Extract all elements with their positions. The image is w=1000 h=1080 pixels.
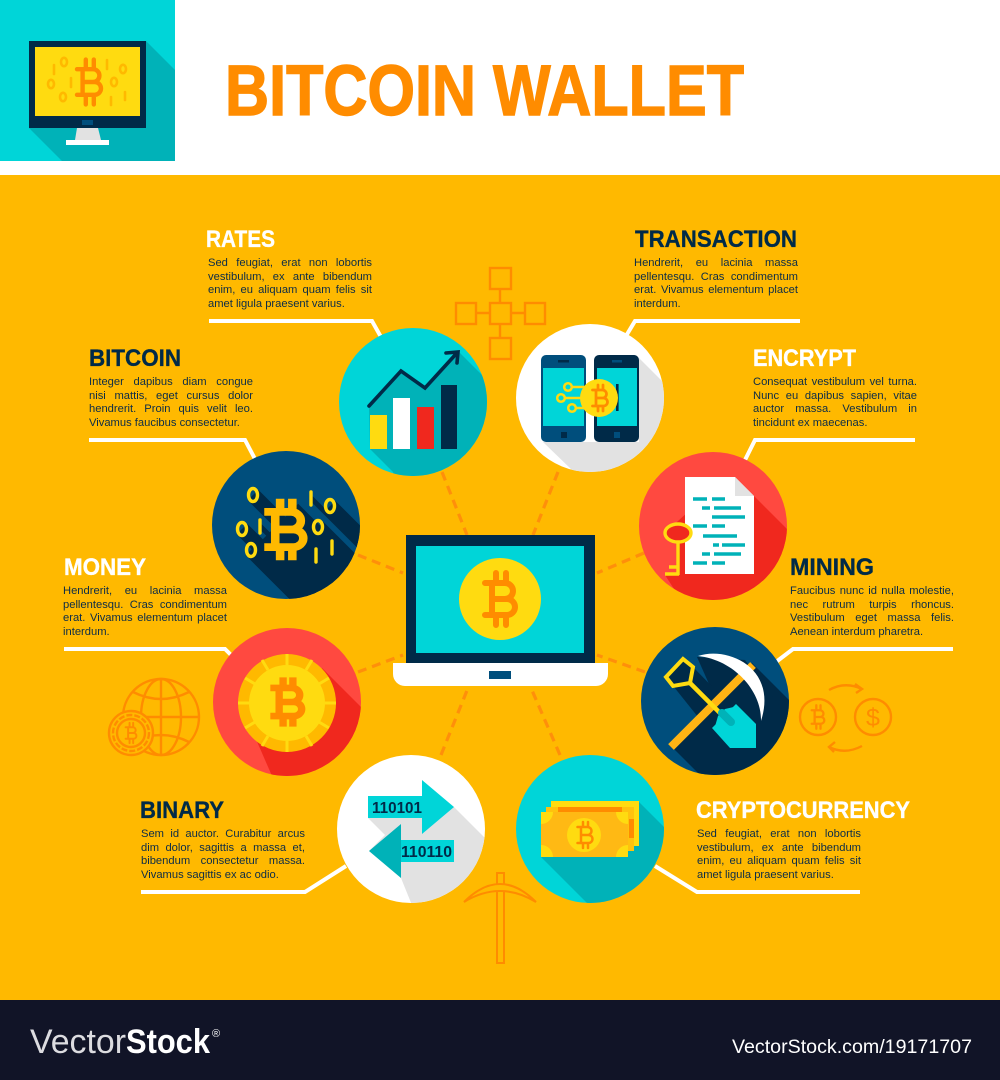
decorative icon: pickaxe <box>464 873 536 963</box>
icon: binary arrows: 110101 <box>372 800 422 817</box>
text: encrypt: Nunc eu dapibus sapien, vitae <box>753 390 917 402</box>
background panel <box>0 175 1000 1000</box>
text: mining: Vestibulum eget massa felis. <box>790 612 954 624</box>
text: bitcoin: hendrerit. Proin quis velit leo. <box>89 403 253 415</box>
dashed connectors to laptop <box>358 472 645 755</box>
text: mining: Aenean interdum pharetra. <box>790 626 923 638</box>
header icon: monitor with bitcoin <box>0 0 175 161</box>
panel: money <box>64 558 361 776</box>
footer logo: Vector <box>30 1023 126 1061</box>
panel: rates <box>207 230 487 476</box>
heading: money: MONEY <box>64 554 146 581</box>
heading: encrypt: ENCRYPT <box>753 345 856 372</box>
text: transaction: erat. Vivamus elementum placet <box>634 284 798 296</box>
footer logo: ® <box>212 1028 220 1040</box>
icon: bitcoin with bits <box>212 451 360 599</box>
footer bar <box>0 1000 1000 1080</box>
panel: encrypt <box>639 349 916 600</box>
text: transaction: pellentesqu. Cras condimentum <box>634 271 798 283</box>
text: mining: nec rutrum turpis rhoncus. <box>790 599 954 611</box>
heading: rates: RATES <box>206 226 275 253</box>
text: cryptocurrency <box>697 828 861 884</box>
text: bitcoin: Vivamus faucibus consectetur. <box>89 417 240 429</box>
heading: mining: MINING <box>790 554 874 581</box>
footer logo <box>30 1023 220 1061</box>
title: BITCOIN WALLET <box>225 52 744 131</box>
panel: mining <box>641 558 953 775</box>
text: binary <box>141 828 305 884</box>
text: binary: bibendum consectetur massa. <box>141 855 305 867</box>
text: rates: amet ligula praesent varius. <box>208 298 345 310</box>
heading: transaction: TRANSACTION <box>635 226 797 253</box>
text: encrypt <box>753 376 917 432</box>
text: binary: dim dolor, sagittis a massa et, <box>141 842 305 854</box>
panel: binary <box>141 755 485 903</box>
text: rates <box>208 257 372 313</box>
text: money: pellentesqu. Cras condimentum <box>63 599 227 611</box>
text: money: erat. Vivamus elementum placet <box>63 612 227 624</box>
text: money: Hendrerit, eu lacinia massa <box>63 585 227 597</box>
decorative icon: currency exchange: $ <box>866 704 880 732</box>
panel: cryptocurrency <box>516 755 910 903</box>
text: rates: vestibulum, ex ante bibendum <box>208 271 372 283</box>
heading: bitcoin: BITCOIN <box>89 345 181 372</box>
text: rates: enim, eu aliquam quam felis sit <box>208 284 372 296</box>
icon: binary arrows <box>337 755 485 903</box>
text: mining <box>790 585 954 641</box>
text: rates: Sed feugiat, erat non lobortis <box>208 257 372 269</box>
text: encrypt: Consequat vestibulum vel turna. <box>753 376 917 388</box>
icon: phones with coin <box>516 324 664 472</box>
icon: pickaxe and shovel <box>641 627 789 775</box>
decorative icon: currency exchange <box>800 684 891 752</box>
text: mining: Faucibus nunc id nulla molestie, <box>790 585 954 597</box>
text: transaction: Hendrerit, eu lacinia massa <box>634 257 798 269</box>
footer logo: Stock <box>126 1023 210 1061</box>
text: bitcoin: Integer dapibus diam congue <box>89 376 253 388</box>
icon: binary arrows: 110110 <box>401 844 452 861</box>
text: encrypt: tincidunt ex maecenas. <box>753 417 867 429</box>
text: transaction <box>634 257 798 313</box>
text: binary: Sem id auctor. Curabitur arcus <box>141 828 305 840</box>
text: cryptocurrency: enim, eu aliquam quam felis sit <box>697 855 861 867</box>
text: bitcoin: nisi mattis, eget cursus dolor <box>89 390 253 402</box>
text: encrypt: auctor massa. Vestibulum in <box>753 403 917 415</box>
icon: banknotes <box>516 755 664 903</box>
text: bitcoin <box>89 376 253 432</box>
panel: bitcoin <box>89 349 360 599</box>
text: binary: Vivamus sagittis ex ac odio. <box>141 869 279 881</box>
icon: coin <box>213 628 361 776</box>
decorative icon: block network <box>456 268 545 359</box>
text: money <box>63 585 227 641</box>
text: transaction: interdum. <box>634 298 681 310</box>
footer url: VectorStock.com/19171707 <box>732 1037 972 1058</box>
decorative icon: globe with coin <box>109 679 199 755</box>
heading: cryptocurrency: CRYPTOCURRENCY <box>696 797 910 824</box>
text: cryptocurrency: Sed feugiat, erat non lobortis <box>697 828 861 840</box>
heading: binary: BINARY <box>140 797 224 824</box>
icon: document with key <box>639 452 787 600</box>
text: cryptocurrency: amet ligula praesent varius. <box>697 869 834 881</box>
panel: transaction <box>516 230 800 472</box>
icon: rates chart <box>339 328 487 476</box>
central laptop <box>393 535 608 686</box>
text: cryptocurrency: vestibulum, ex ante bibendum <box>697 842 861 854</box>
text: money: interdum. <box>63 626 110 638</box>
